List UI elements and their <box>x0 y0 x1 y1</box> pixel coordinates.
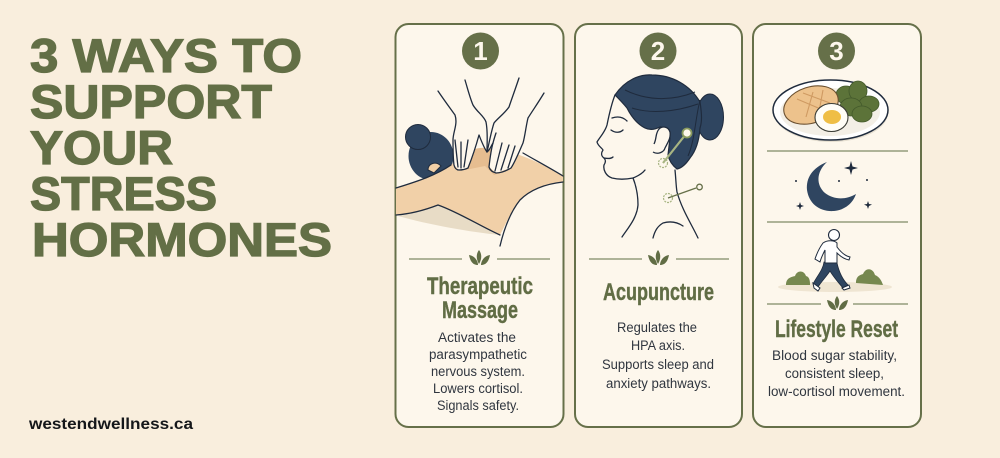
icon: person walking <box>778 230 892 292</box>
website footer: westendwellness.ca <box>28 416 193 433</box>
divider with leaf <box>589 250 729 265</box>
description: Regulates the <box>617 320 697 335</box>
description: Activates the <box>438 330 516 345</box>
illustration: massage <box>396 78 563 246</box>
number badge 1: 1 <box>473 36 488 66</box>
panel: acupuncture <box>575 24 742 427</box>
description: Lowers cortisol. <box>433 381 523 396</box>
heading: Lifestyle Reset <box>775 316 898 343</box>
number badge 3 <box>818 32 855 70</box>
description: Blood sugar stability, <box>772 348 897 363</box>
number badge 2: 2 <box>651 36 665 66</box>
description: consistent sleep, <box>785 366 884 381</box>
title: HORMONES <box>32 213 332 266</box>
title: STRESS <box>30 167 217 220</box>
divider with leaf <box>767 296 908 310</box>
heading <box>427 273 533 324</box>
title: SUPPORT <box>30 75 272 128</box>
illustration: head with acupuncture needles <box>597 75 724 238</box>
heading: Massage <box>442 297 518 324</box>
heading: Acupuncture <box>603 279 714 306</box>
description: low-cortisol movement. <box>768 384 905 399</box>
icon: plate of food <box>773 79 888 142</box>
description <box>768 348 905 399</box>
title: YOUR <box>30 121 173 174</box>
divider with leaf <box>409 250 550 265</box>
panel: lifestyle reset <box>753 24 921 427</box>
description: parasympathetic <box>429 347 527 362</box>
panel: therapeutic massage <box>396 24 564 427</box>
number badge 2 <box>640 32 676 70</box>
description: HPA axis. <box>631 338 685 353</box>
description: Signals safety. <box>437 398 519 413</box>
description: nervous system. <box>431 364 525 379</box>
description: anxiety pathways. <box>606 376 711 391</box>
description: Supports sleep and <box>602 357 714 372</box>
heading: Therapeutic <box>427 273 533 300</box>
icon: moon and stars <box>795 161 872 211</box>
description <box>602 320 714 391</box>
number badge 3: 3 <box>829 36 844 66</box>
title: 3 WAYS TO <box>30 29 302 82</box>
description <box>429 330 527 413</box>
title <box>30 29 332 266</box>
number badge 1 <box>462 32 499 70</box>
